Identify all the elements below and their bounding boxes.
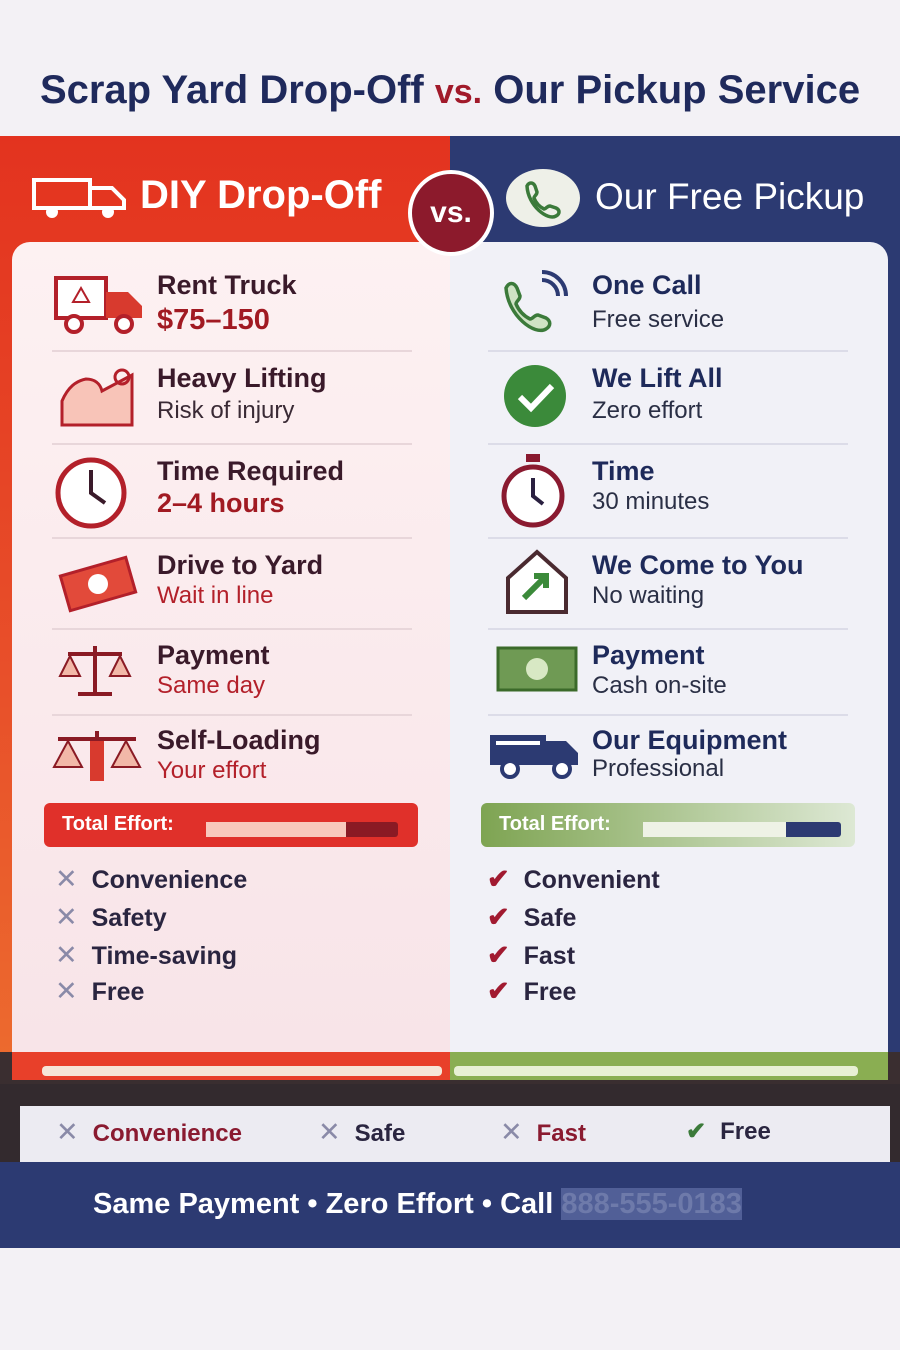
row: we lift all: Zero effort bbox=[592, 397, 702, 424]
row: we lift all: We Lift All bbox=[592, 363, 722, 393]
right heading bbox=[506, 169, 864, 227]
icon: truck bbox=[32, 178, 126, 218]
left heading bbox=[32, 173, 382, 218]
left heading: DIY Drop-Off bbox=[140, 173, 381, 217]
row: rent truck: $75–150 bbox=[157, 304, 270, 336]
row: drive to yard bbox=[58, 550, 323, 612]
row: self-loading: Self-Loading bbox=[157, 725, 320, 755]
row: time required: Time Required bbox=[157, 456, 344, 486]
right checklist: ✔ Fast bbox=[487, 940, 575, 970]
right checklist: ✔ Free bbox=[487, 976, 576, 1006]
right header band bbox=[450, 136, 900, 1056]
row: payment: Cash on-site bbox=[592, 672, 727, 699]
summary strip: ✕ Fast bbox=[500, 1117, 586, 1147]
row: our equipment: Professional bbox=[592, 755, 724, 782]
row: time required: 2–4 hours bbox=[157, 488, 285, 518]
title: Scrap Yard Drop-Off vs. Our Pickup Service bbox=[40, 68, 860, 112]
row: we come to you: No waiting bbox=[592, 582, 704, 609]
row: time required bbox=[56, 456, 344, 528]
vs badge bbox=[408, 170, 494, 256]
right checklist bbox=[487, 864, 660, 1006]
row: payment: Same day bbox=[157, 672, 265, 699]
icon: phone circle bbox=[506, 169, 580, 227]
footer bbox=[0, 1162, 900, 1248]
left header band bbox=[0, 136, 450, 1056]
footer: Same Payment • Zero Effort • Call 888-555-0183 bbox=[93, 1188, 742, 1220]
row: we come to you: We Come to You bbox=[592, 550, 804, 580]
row: payment: Payment bbox=[157, 640, 270, 670]
summary strip: ✕ Safe bbox=[318, 1117, 405, 1147]
row: self-loading bbox=[52, 725, 320, 784]
row: payment bbox=[58, 640, 270, 699]
summary strip: ✕ Convenience bbox=[56, 1117, 242, 1147]
row: self-loading: Your effort bbox=[157, 757, 266, 784]
row: drive to yard: Drive to Yard bbox=[157, 550, 323, 580]
row: our equipment bbox=[490, 725, 787, 782]
left checklist: ✕ Free bbox=[55, 976, 144, 1006]
left checklist: ✕ Safety bbox=[55, 902, 167, 932]
row: one call: One Call bbox=[592, 270, 702, 300]
left checklist: ✕ Convenience bbox=[55, 864, 247, 894]
left total effort bar bbox=[44, 803, 418, 847]
summary strip bbox=[20, 1106, 890, 1162]
right heading: Our Free Pickup bbox=[595, 176, 864, 217]
row: our equipment: Our Equipment bbox=[592, 725, 787, 755]
right card bbox=[450, 242, 888, 1057]
row: we come to you bbox=[506, 550, 804, 614]
vs badge: vs. bbox=[430, 196, 472, 229]
summary strip: ✔ Free bbox=[686, 1118, 771, 1145]
row: heavy lifting: Heavy Lifting bbox=[157, 363, 327, 393]
row: one call: Free service bbox=[592, 306, 724, 333]
right checklist: ✔ Convenient bbox=[487, 864, 660, 894]
left checklist: ✕ Time-saving bbox=[55, 940, 237, 970]
right rows bbox=[490, 270, 804, 782]
left total effort bar: Total Effort: bbox=[62, 813, 174, 835]
left checklist bbox=[55, 864, 247, 1006]
row: rent truck: Rent Truck bbox=[157, 270, 297, 300]
right checklist: ✔ Safe bbox=[487, 902, 576, 932]
row: one call bbox=[504, 270, 724, 333]
row: heavy lifting bbox=[60, 363, 327, 426]
row: drive to yard: Wait in line bbox=[157, 582, 273, 609]
bottom progress strips bbox=[0, 1052, 900, 1084]
row: heavy lifting: Risk of injury bbox=[157, 397, 294, 424]
row: we lift all bbox=[504, 363, 722, 427]
left card bbox=[12, 242, 452, 1057]
left rows bbox=[52, 270, 344, 784]
row: time bbox=[502, 454, 709, 528]
right total effort bar: Total Effort: bbox=[499, 813, 611, 835]
row: payment bbox=[496, 640, 727, 699]
row: time: 30 minutes bbox=[592, 488, 709, 515]
row: rent truck bbox=[54, 270, 297, 336]
row: payment: Payment bbox=[592, 640, 705, 670]
dark frame bbox=[0, 1084, 900, 1164]
right total effort bar bbox=[481, 803, 855, 847]
row: time: Time bbox=[592, 456, 655, 486]
